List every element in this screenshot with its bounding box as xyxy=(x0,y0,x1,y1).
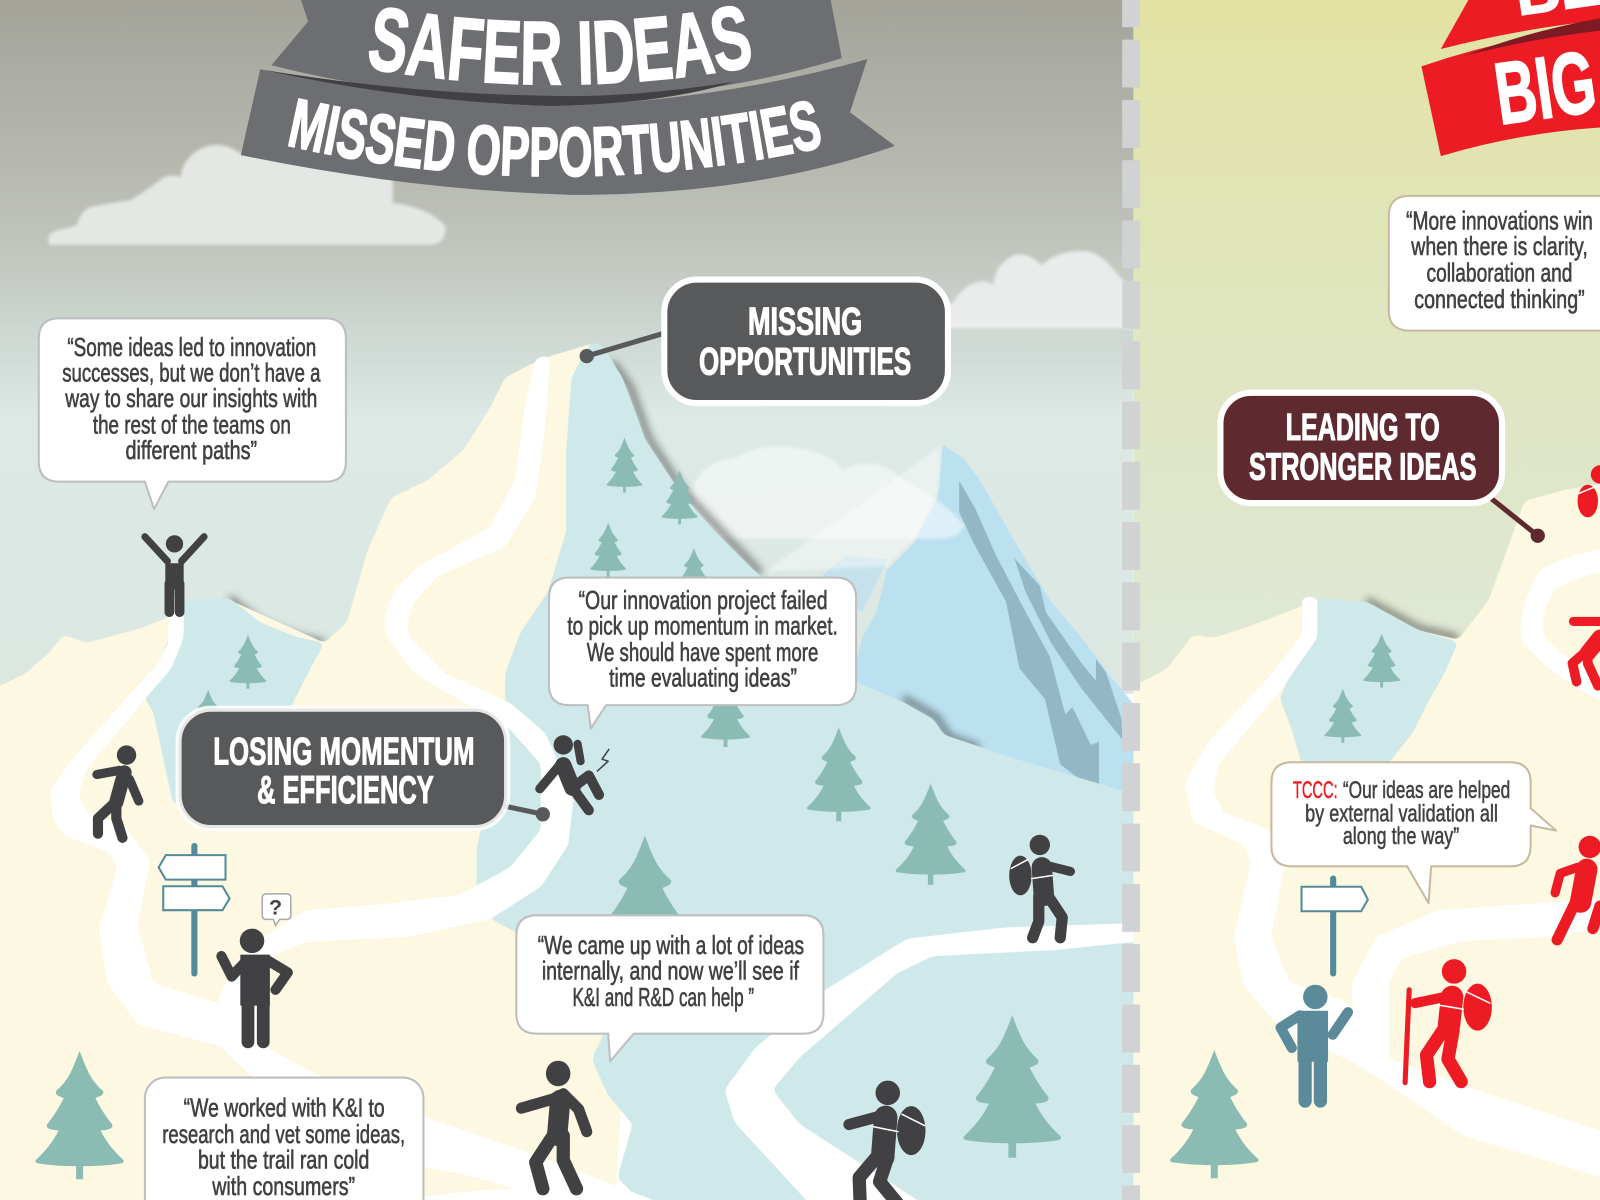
speech bubble: external validation xyxy=(1271,762,1556,903)
speech bubble: project failed: We should have spent more xyxy=(587,637,818,667)
ground: small lake xyxy=(1280,598,1458,765)
speech bubble: trail ran cold: research and vet some ideas, xyxy=(162,1119,405,1149)
speech bubble: lots of ideas: “We came up with a lot of ideas xyxy=(538,930,804,960)
ground: small lake xyxy=(145,598,324,806)
figure: walking left trail xyxy=(97,745,139,838)
label: losing momentum xyxy=(179,709,550,828)
title banner: red upper xyxy=(1441,0,1600,49)
figure: red hiker top edge xyxy=(1578,465,1600,517)
question bubble: ? xyxy=(269,895,282,919)
speech bubble: innovation successes: way to share our insights with xyxy=(65,383,317,413)
panel: bigger ideas scene xyxy=(1092,0,1600,1200)
speech bubble: project failed: time evaluating ideas” xyxy=(609,663,797,693)
speech bubble: external validation: TCCC: xyxy=(1293,777,1338,804)
trail: main route xyxy=(1185,597,1600,1193)
trail: branch over summit xyxy=(216,355,573,1031)
speech bubble: trail ran cold: but the trail ran cold xyxy=(198,1144,369,1174)
label: missing opportunities: MISSING xyxy=(748,301,862,344)
cloud: upper right xyxy=(944,251,1134,329)
speech bubble: innovation successes: “Some ideas led to innovation xyxy=(67,332,316,362)
title banner: red lower xyxy=(1421,18,1600,156)
speech bubble: innovation successes xyxy=(39,318,346,509)
divider: dashed line between panels xyxy=(1122,0,1140,1200)
label: losing momentum: LOSING MOMENTUM xyxy=(213,730,474,773)
label: missing opportunities: OPPORTUNITIES xyxy=(699,340,911,383)
snow haze on peak xyxy=(765,446,940,571)
figure: walker bottom xyxy=(521,1061,587,1189)
signpost xyxy=(159,843,230,977)
back mountain peak xyxy=(818,445,1134,806)
figure: hiker upper right xyxy=(1009,835,1070,938)
trail: branch route xyxy=(1352,896,1600,1061)
speech bubble: external validation: “Our ideas are helped xyxy=(1343,777,1510,804)
ground: cream land xyxy=(0,343,653,1200)
trees xyxy=(35,438,1061,1179)
cloud: upper left xyxy=(48,145,446,245)
speech bubble: lots of ideas xyxy=(516,915,823,1061)
ridge shadow xyxy=(1366,600,1458,638)
speech bubble: project failed xyxy=(549,578,856,729)
speech bubble: clarity xyxy=(1389,196,1600,331)
speech bubble: innovation successes: the rest of the teams on xyxy=(93,410,291,440)
label: losing momentum: & EFFICIENCY xyxy=(257,769,434,812)
signpost xyxy=(1302,876,1368,977)
speech bubble: trail ran cold: “We worked with K&I to xyxy=(184,1092,385,1122)
title banner: missed opportunities xyxy=(240,59,895,195)
figure: guide in teal xyxy=(1281,985,1348,1101)
speech bubble: project failed: “Our innovation project failed xyxy=(579,585,828,615)
label: leading to stronger ideas: STRONGER IDEAS xyxy=(1249,446,1477,488)
speech bubble: trail ran cold: with consumers” xyxy=(211,1171,355,1200)
trail: left route xyxy=(50,597,714,1200)
ground: teal valley and mountain xyxy=(477,343,1173,1200)
speech bubble: innovation successes: successes, but we don’t have a xyxy=(62,358,321,388)
title banner: missed opportunities: MISSED OPPORTUNITIES xyxy=(288,98,821,178)
speech bubble: lots of ideas: K&I and R&D can help ” xyxy=(572,982,754,1012)
figure: hiker lower xyxy=(849,1081,926,1200)
label: leading to stronger ideas: LEADING TO xyxy=(1286,406,1440,448)
cloud: mist across peak xyxy=(694,446,964,539)
speech bubble: project failed: to pick up momentum in market. xyxy=(567,611,838,641)
ground: cream wedge beside trail xyxy=(424,1167,515,1197)
trail: upper route xyxy=(1521,541,1600,724)
sky background xyxy=(1134,0,1600,694)
label: leading to stronger ideas xyxy=(1220,393,1545,543)
speech bubble: innovation successes: different paths” xyxy=(126,435,257,465)
figure: red walker lower xyxy=(1555,836,1600,940)
figure: struck on head xyxy=(540,735,609,810)
speech bubble: lots of ideas: internally, and now we’ll see if xyxy=(542,956,800,986)
panel: safer ideas scene xyxy=(0,0,1134,1200)
question bubble xyxy=(262,894,291,926)
figure: arms raised xyxy=(145,535,204,612)
ground: cream land xyxy=(1092,476,1600,1200)
speech bubble: trail ran cold xyxy=(145,1078,423,1200)
speech bubble: external validation: by external validation all xyxy=(1305,800,1498,827)
label: missing opportunities xyxy=(580,280,948,403)
figure: red walker upper xyxy=(1572,621,1600,686)
figure: red hiker with stick xyxy=(1405,959,1492,1083)
figure body xyxy=(221,929,288,1042)
ridge shadows xyxy=(230,362,980,748)
trees xyxy=(1170,634,1400,1178)
figure: confused with question xyxy=(221,894,291,1042)
trail: right valley route xyxy=(726,923,1134,1200)
sky background xyxy=(0,0,1134,694)
speech bubble: external validation: along the way” xyxy=(1343,823,1459,850)
